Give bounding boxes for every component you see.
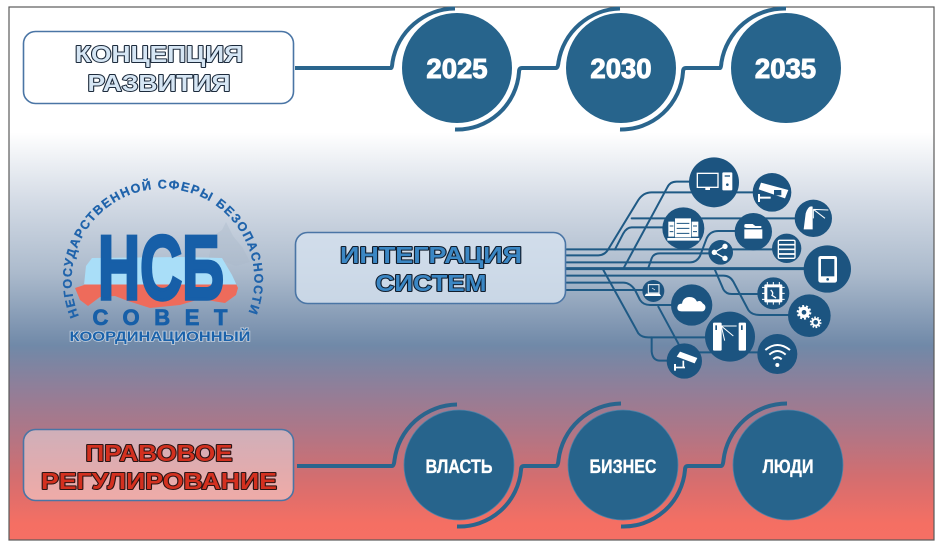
network diagram: [567, 157, 851, 379]
icon: turnstile: [795, 200, 832, 237]
icon: storage rack: [772, 234, 801, 263]
authorities: [404, 410, 514, 520]
business: БИЗНЕС: [590, 457, 657, 478]
icon: chip: [757, 277, 789, 309]
icon: folder: [735, 213, 772, 250]
icon: tablet: [804, 245, 851, 293]
timeline: years: [295, 8, 841, 130]
business: [568, 410, 678, 520]
panel: development concept box: РАЗВИТИЯ: [88, 70, 230, 96]
people: ЛЮДИ: [762, 457, 814, 478]
big letters: НСБ: [98, 218, 224, 319]
icon: laptop: [642, 280, 664, 302]
year 2025: 2025: [426, 53, 488, 84]
council word: СОВЕТ: [92, 305, 228, 330]
icon: computer: [689, 157, 739, 207]
panel: systems integration box: ИНТЕГРАЦИЯ: [340, 242, 522, 268]
year 2035: [731, 13, 841, 123]
icon: cloud: [671, 284, 712, 326]
authorities: ВЛАСТЬ: [426, 457, 492, 478]
map of Russia: [75, 257, 238, 308]
icon: gears: [788, 294, 831, 337]
icon: security camera: [667, 343, 702, 379]
arc text: НЕГОСУДАРСТВЕННОЙ СФЕРЫ БЕЗОПАСНОСТИ: [62, 178, 264, 318]
panel: legal regulation box: ПРАВОВОЕ: [86, 440, 232, 466]
panel: development concept box: [24, 32, 294, 104]
panel: systems integration box: [296, 232, 566, 304]
logo: NSB coordination council: [62, 178, 264, 345]
panel: legal regulation box: РЕГУЛИРОВАНИЕ: [41, 468, 277, 494]
people: [733, 410, 843, 520]
timeline: stakeholders: [297, 404, 843, 527]
panel: legal regulation box: [24, 430, 294, 500]
icon: share: [708, 240, 733, 265]
map ghost: [208, 222, 250, 266]
icon: cctv camera: [753, 173, 791, 212]
year 2030: 2030: [590, 53, 652, 84]
coordination word: КООРДИНАЦИОННЫЙ: [70, 327, 250, 344]
year 2025: [402, 13, 512, 123]
icon: access gate: [705, 312, 755, 362]
panel: development concept box: КОНЦЕПЦИЯ: [75, 41, 243, 67]
year 2030: [566, 13, 676, 123]
icon: server: [662, 207, 704, 249]
icon: wifi: [757, 334, 797, 374]
year 2035: 2035: [755, 53, 816, 84]
circuit lines: [567, 182, 810, 361]
panel: systems integration box: СИСТЕМ: [376, 270, 486, 296]
